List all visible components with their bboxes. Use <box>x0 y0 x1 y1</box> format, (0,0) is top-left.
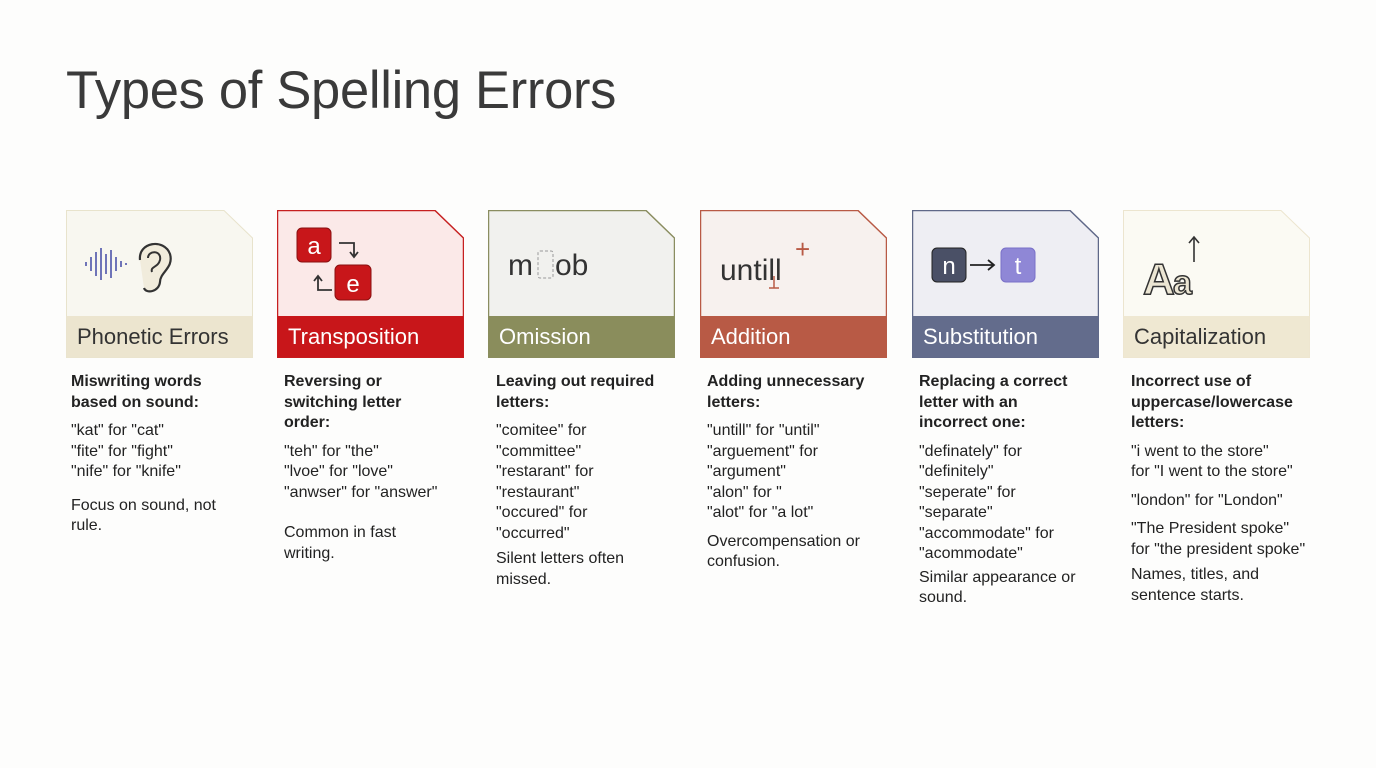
label: Phonetic Errors <box>77 324 229 349</box>
text: omission <box>496 373 654 588</box>
panel: substitution card <box>912 210 1099 358</box>
panel: capitalization card: Capitalization <box>1134 324 1266 349</box>
text: phonetic: "nife" for "knife" <box>71 463 181 480</box>
text: phonetic: Miswriting words <box>71 373 202 390</box>
text: phonetic: "kat" for "cat" <box>71 422 164 439</box>
panel: capitalization card: a <box>1173 264 1193 302</box>
text: transposition <box>284 373 437 562</box>
text: substitution: sound. <box>919 589 967 606</box>
text: capitalization: letters: <box>1131 414 1184 431</box>
text: omission: Leaving out required <box>496 373 654 390</box>
text: capitalization: sentence starts. <box>1131 586 1244 604</box>
text: omission: "comitee" for <box>496 422 586 439</box>
text: capitalization: Incorrect use of <box>1131 373 1251 390</box>
text: capitalization: "i went to the store" <box>1131 442 1269 460</box>
text: substitution <box>919 373 1076 606</box>
text: capitalization: Names, titles, and <box>1131 566 1259 583</box>
text: capitalization <box>1131 373 1305 604</box>
text: phonetic <box>71 373 216 534</box>
panel: addition card: Addition <box>711 324 791 349</box>
panel: transposition card: a <box>307 233 321 260</box>
text: substitution: "separate" <box>919 504 993 521</box>
text: substitution: letter with an <box>919 394 1018 410</box>
panel: substitution card: t <box>1015 253 1022 280</box>
panel: phonetic card <box>66 210 253 358</box>
panel: capitalization card <box>1123 210 1310 358</box>
text: phonetic: based on sound: <box>71 394 199 410</box>
text: omission: "occurred" <box>496 524 570 542</box>
text: omission: letters: <box>496 394 549 410</box>
panel: addition card <box>700 210 887 358</box>
text: addition: "untill" for "until" <box>707 422 820 439</box>
text: substitution: "acommodate" <box>919 545 1023 562</box>
text: substitution: Replacing a correct <box>919 373 1068 390</box>
text: substitution: Similar appearance or <box>919 568 1076 586</box>
text: transposition: switching letter <box>284 394 401 410</box>
text: phonetic: "fite" for "fight" <box>71 442 173 460</box>
text: substitution: incorrect one: <box>919 414 1026 431</box>
text: omission: Silent letters often <box>496 550 624 567</box>
panel: transposition card <box>277 210 464 358</box>
text: capitalization: "The President spoke" <box>1131 520 1289 537</box>
text: addition: "arguement" for <box>707 442 818 460</box>
panel: addition card: + <box>795 234 810 264</box>
text: addition: "argument" <box>707 463 786 480</box>
panel: transposition card: Transposition <box>288 324 419 349</box>
panel: omission card: m <box>508 249 533 282</box>
text: omission: missed. <box>496 570 551 588</box>
text: transposition: "teh" for "the" <box>284 442 379 460</box>
text: substitution: "seperate" for <box>919 484 1016 500</box>
text: omission: "restaurant" <box>496 484 579 500</box>
text: addition: "alot" for "a lot" <box>707 504 813 521</box>
text: capitalization: for "the president spoke" <box>1131 540 1305 558</box>
text: transposition: writing. <box>284 544 335 562</box>
text: transposition: order: <box>284 414 330 431</box>
text: transposition: "lvoe" for "love" <box>284 463 393 480</box>
text: transposition: Reversing or <box>284 373 382 390</box>
text: addition: confusion. <box>707 553 780 570</box>
panel: addition card: untill <box>720 254 782 287</box>
text: substitution: "accommodate" for <box>919 524 1054 542</box>
text: omission: "restarant" for <box>496 463 594 480</box>
text: substitution: "definately" for <box>919 442 1022 460</box>
panel: capitalization card: A <box>1143 255 1175 304</box>
panel: omission card: ob <box>555 249 588 282</box>
text: phonetic: Focus on sound, not <box>71 496 216 514</box>
text: addition: Adding unnecessary <box>707 373 864 390</box>
panel: transposition card: e <box>346 271 360 298</box>
panel: substitution card: Substitution <box>923 324 1038 349</box>
text: addition: Overcompensation or <box>707 532 860 550</box>
text: capitalization: "london" for "London" <box>1131 492 1283 508</box>
text: omission: "occured" for <box>496 504 587 521</box>
text: capitalization: uppercase/lowercase <box>1131 394 1293 410</box>
panel: omission card <box>488 210 675 358</box>
text: addition: letters: <box>707 394 760 410</box>
text: addition <box>707 373 864 570</box>
text: substitution: "definitely" <box>919 463 994 480</box>
text: addition: "alon" for " <box>707 484 782 500</box>
text: phonetic: rule. <box>71 517 102 534</box>
text: capitalization: for "I went to the store" <box>1131 463 1293 480</box>
text: omission: "committee" <box>496 442 581 460</box>
panel: omission card: Omission <box>499 324 591 349</box>
panel: substitution card: n <box>942 253 956 280</box>
title: Types of Spelling Errors <box>66 61 616 120</box>
text: transposition: Common in fast <box>284 524 396 541</box>
text: transposition: "anwser" for "answer" <box>284 484 437 500</box>
